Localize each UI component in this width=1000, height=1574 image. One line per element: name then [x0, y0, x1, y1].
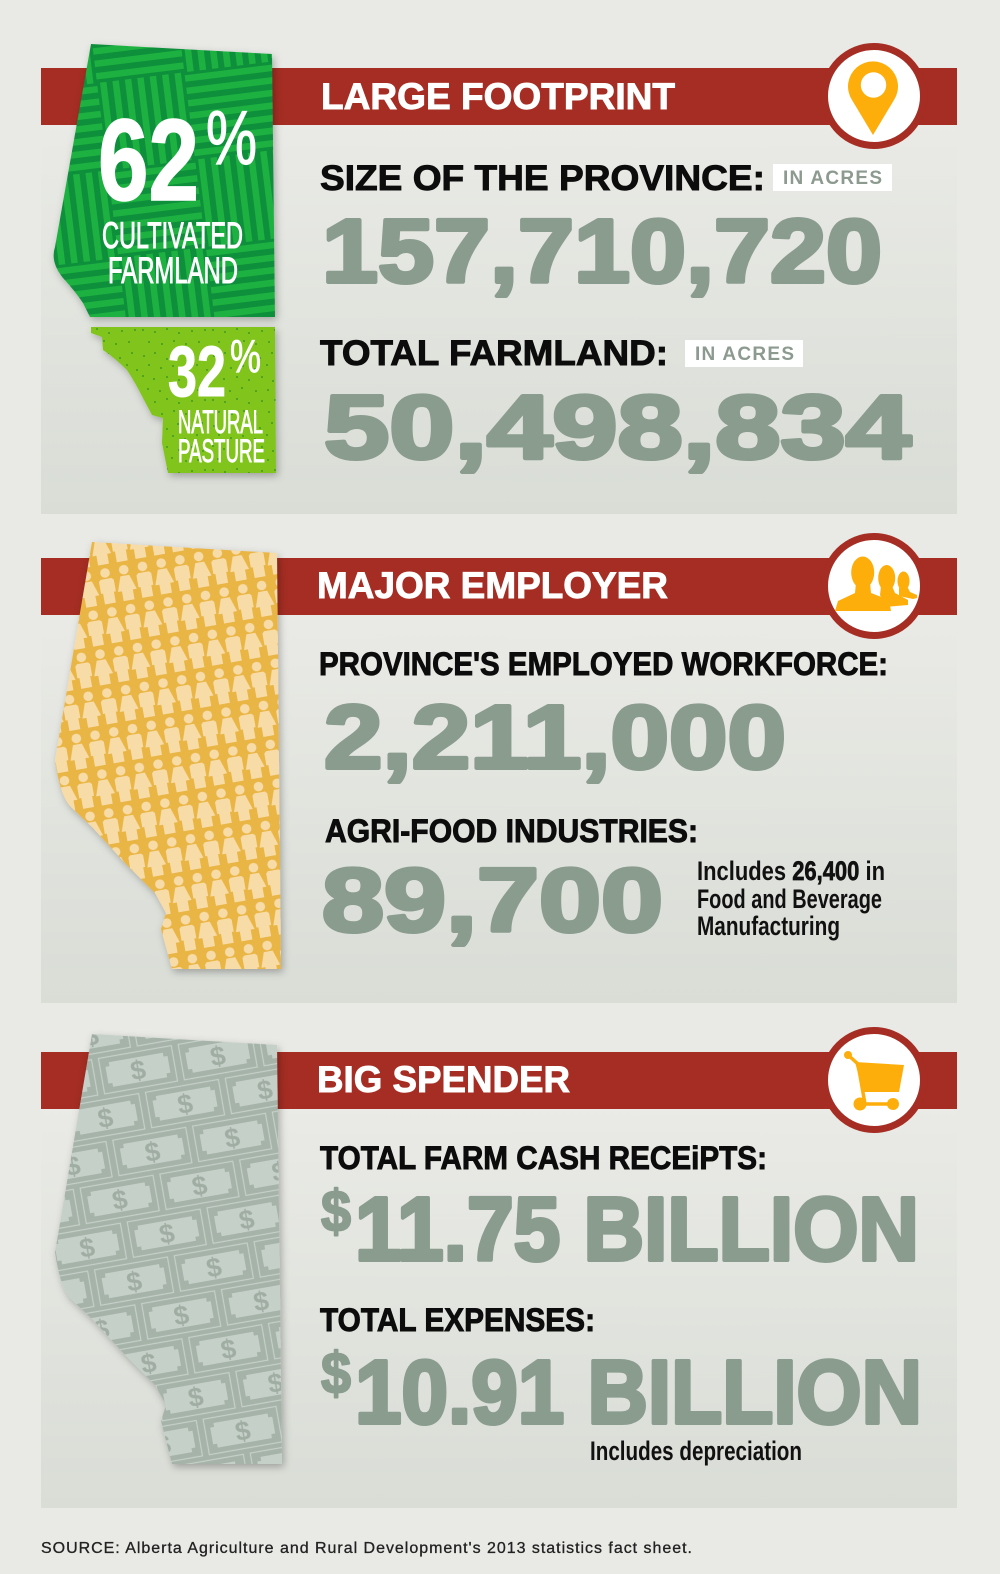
subheading: total expenses: TOTAL EXPENSES: [320, 1302, 595, 1338]
map: natural pasture: 32 [168, 333, 226, 412]
subheading: total farmland: TOTAL FARMLAND: [320, 334, 668, 373]
heading: big spender: BIG SPENDER [317, 1059, 570, 1100]
icon: shopping cart [824, 1030, 924, 1130]
heading: major employer: MAJOR EMPLOYER [317, 565, 668, 606]
map: natural pasture: % [230, 330, 261, 382]
header band: major employer [41, 558, 957, 615]
number: expenses: $ [321, 1341, 351, 1406]
map: natural pasture [91, 327, 276, 473]
icon: location pin [824, 46, 924, 146]
subheading: size of the province: SIZE OF THE PROVINCE: [320, 159, 765, 198]
note: food and beverage manufacturing: Manufacturing [697, 911, 840, 941]
map: natural pasture: NATURAL [178, 404, 263, 440]
note: food and beverage manufacturing [697, 856, 885, 941]
panel: major employer [41, 536, 957, 1003]
tag: in acres: IN ACRES [783, 168, 882, 189]
note: includes depreciation: Includes depreciation [590, 1436, 802, 1466]
number: expenses: 10.91 BILLION [355, 1343, 922, 1443]
note: food and beverage manufacturing: Food and Beverage [697, 884, 882, 914]
panel: big spender [41, 1030, 957, 1508]
map: natural pasture: PASTURE [178, 433, 265, 469]
note: food and beverage manufacturing: Includes 26,400 in [697, 856, 885, 886]
map: money pattern [55, 1034, 282, 1464]
tag: in acres: IN ACRES [695, 344, 794, 365]
heading: large footprint: LARGE FOOTPRINT [321, 76, 675, 117]
icon: people [824, 536, 924, 636]
number: workforce: 2,211,000 [324, 688, 786, 788]
map: people pattern [55, 542, 281, 969]
map: cultivated farmland: FARMLAND [108, 250, 238, 291]
map: cultivated farmland: CULTIVATED [102, 215, 243, 256]
number: farmland acres: 50,498,834 [324, 378, 911, 478]
tag: in acres [773, 164, 892, 191]
number: province acres: 157,710,720 [322, 202, 882, 302]
subheading: agri-food industries: AGRI-FOOD INDUSTRIES: [325, 813, 698, 849]
number: agri-food jobs: 89,700 [322, 851, 663, 951]
map: cultivated farmland: % [206, 96, 257, 181]
source line: SOURCE: Alberta Agriculture and Rural Development's 2013 statistics fact sheet. [41, 1540, 692, 1557]
subheading: farm cash receipts: TOTAL FARM CASH RECEiPTS: [320, 1140, 767, 1176]
panel: large footprint [41, 44, 957, 514]
map: cultivated farmland: 62 [98, 95, 199, 225]
header band: large footprint [41, 68, 957, 125]
tag: in acres [685, 340, 803, 367]
header band: big spender [41, 1052, 957, 1109]
number: receipts: $ [321, 1179, 351, 1244]
map: cultivated farmland [54, 44, 275, 317]
subheading: employed workforce: PROVINCE'S EMPLOYED WORKFORCE: [319, 646, 888, 682]
number: receipts: 11.75 BILLION [355, 1180, 919, 1280]
